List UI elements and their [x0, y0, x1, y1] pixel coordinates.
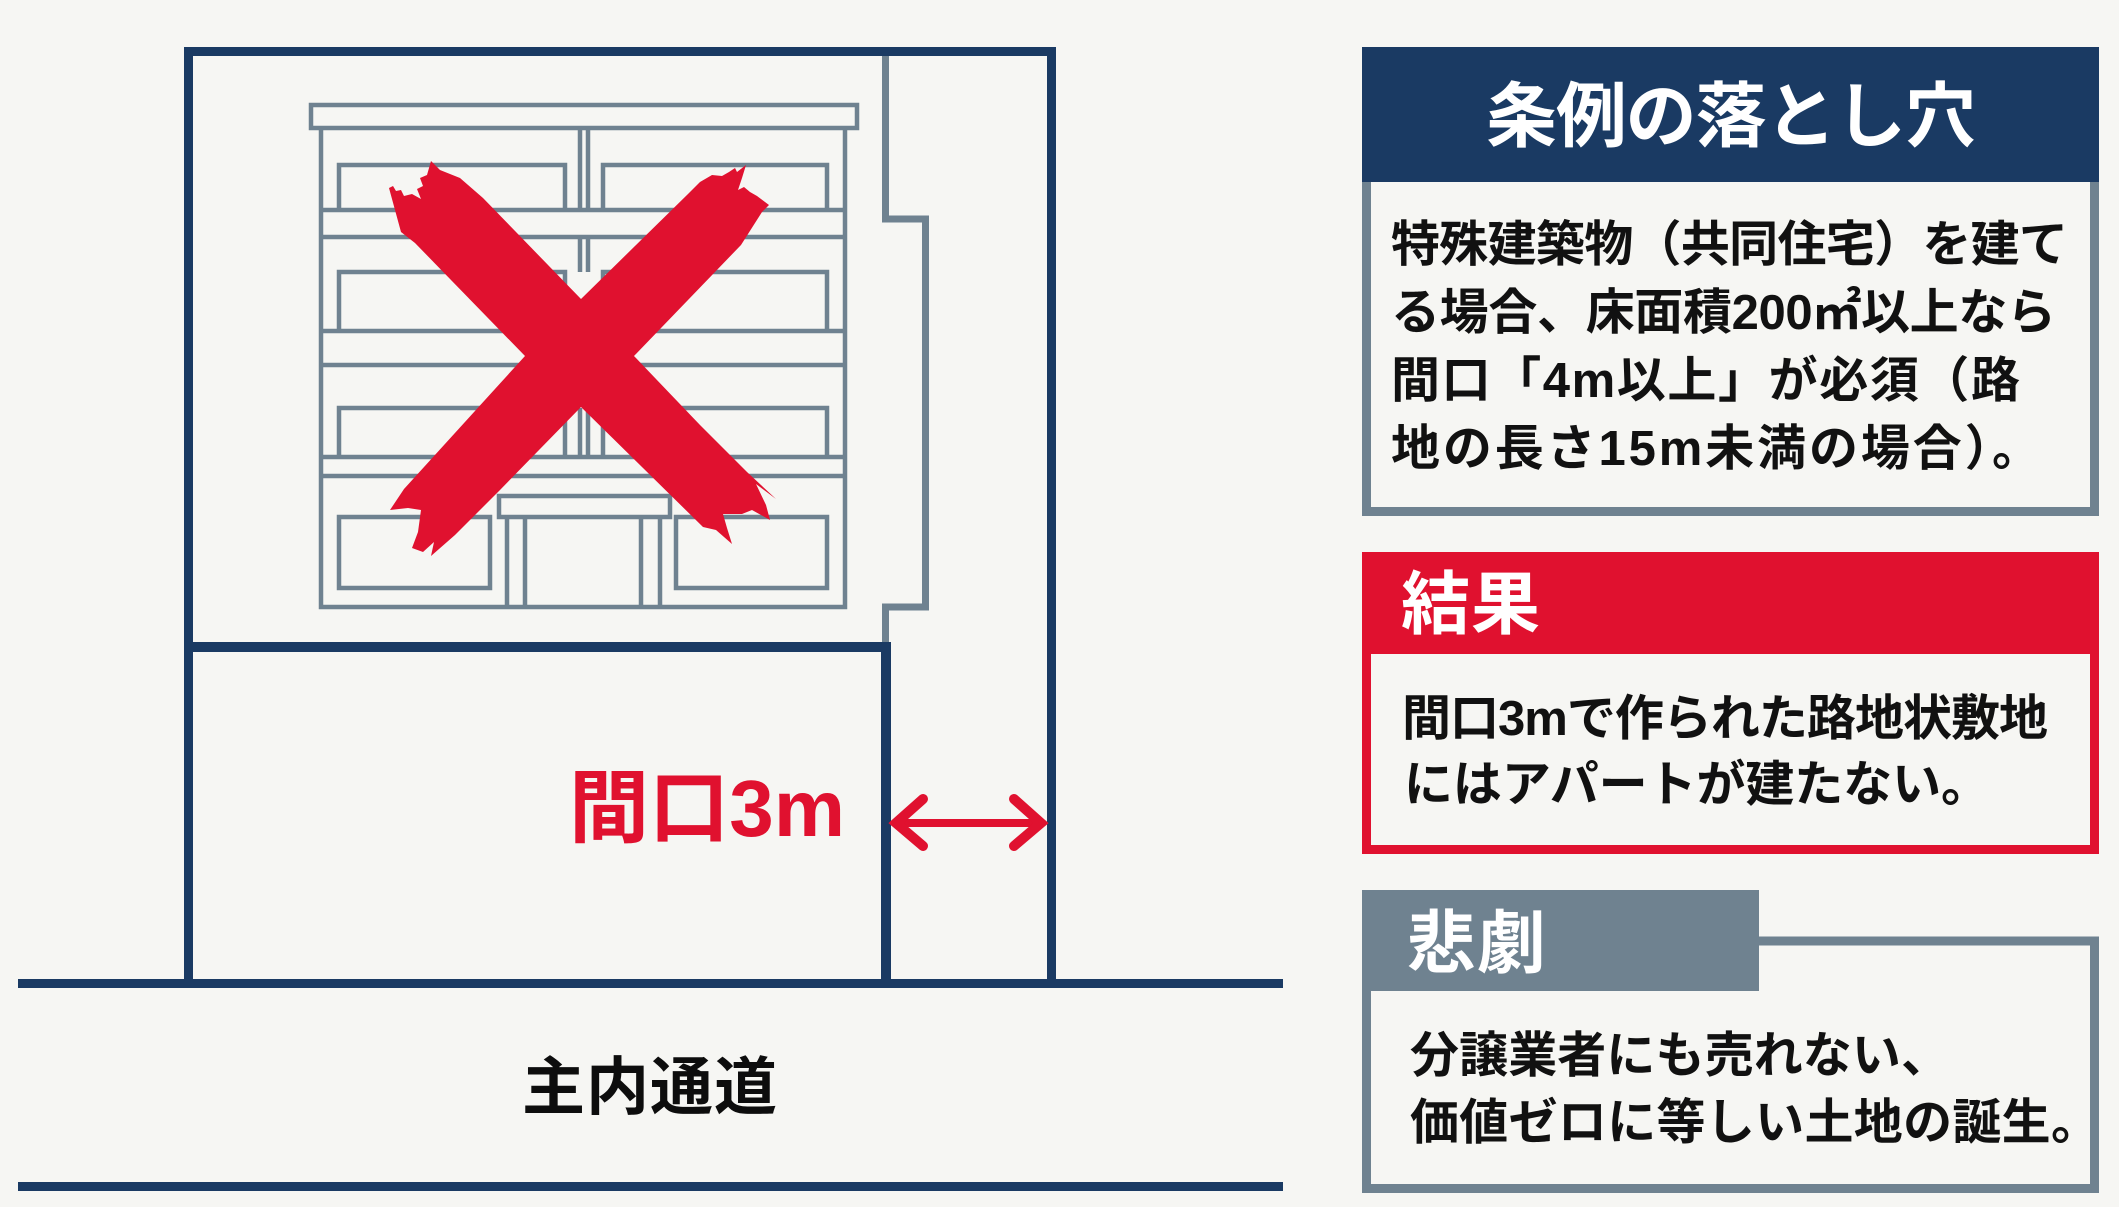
- setback line: [886, 56, 926, 642]
- panel frame: [1366, 941, 2094, 1188]
- panel body text: 間口3mで作られた路地状敷地: [1402, 692, 2048, 746]
- panel: tragedy: [1362, 890, 2100, 1188]
- panel body text: [1410, 1029, 2100, 1150]
- panel body text: 特殊建築物（共同住宅）を建て: [1391, 218, 2068, 272]
- panel frame: [1366, 100, 2094, 512]
- panel: ordinance pitfall: [1362, 47, 2099, 512]
- site plan diagram: [18, 47, 1283, 1191]
- panel body text: 地の長さ15m未満の場合）。: [1391, 422, 2041, 476]
- panel: result: [1362, 552, 2099, 850]
- panel tab header: [1362, 890, 1759, 991]
- panel header: [1362, 552, 2099, 654]
- panel body text: [1391, 218, 2068, 476]
- panel body text: 間口「4m以上」が必須（路: [1391, 354, 2020, 408]
- apartment building icon: [311, 105, 857, 607]
- panel body text: 価値ゼロに等しい土地の誕生。: [1410, 1096, 2100, 1150]
- road label: 主内通道: [522, 1053, 777, 1123]
- panel title: 条例の落とし穴: [1486, 78, 1976, 157]
- double-headed arrow: [896, 799, 1041, 846]
- panel header: [1362, 47, 2099, 182]
- red cross mark: [389, 161, 776, 556]
- panel frame: [1366, 600, 2094, 850]
- panel body text: 分譲業者にも売れない、: [1410, 1029, 1950, 1083]
- panel body text: る場合、床面積200㎡以上なら: [1391, 285, 2056, 340]
- panel body text: [1402, 692, 2048, 812]
- building plot outline: [184, 47, 1056, 982]
- frontage label: 間口3m: [569, 764, 845, 853]
- panel title: 結果: [1401, 566, 1540, 643]
- main road lines: [18, 979, 1283, 1191]
- panel title: 悲劇: [1407, 905, 1546, 982]
- panel body text: にはアパートが建たない。: [1404, 758, 1990, 812]
